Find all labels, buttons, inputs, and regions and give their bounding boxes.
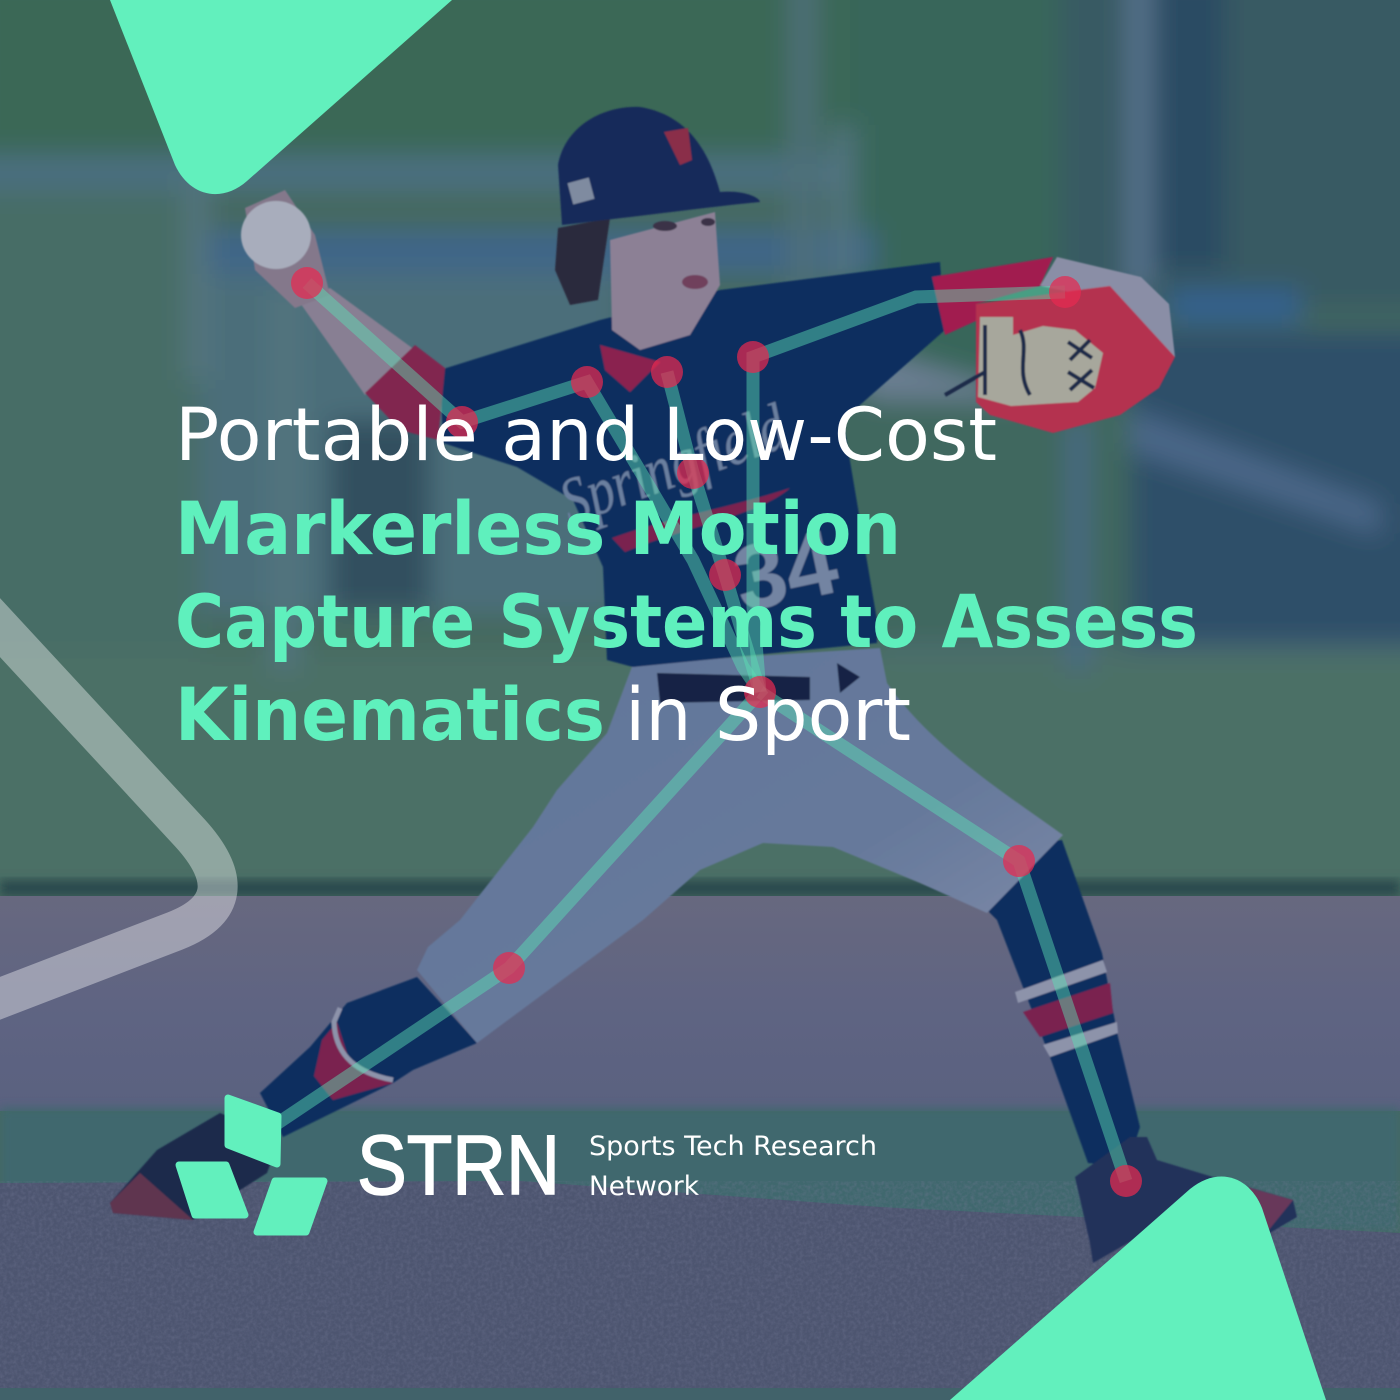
glove [976, 286, 1175, 433]
glove sleeve [932, 257, 1053, 335]
skeleton segments [275, 283, 1126, 1181]
title: Markerless Motion [175, 487, 901, 572]
pants [417, 648, 1063, 1043]
back shoe [110, 1113, 280, 1220]
belt [657, 663, 860, 703]
glove hand [1040, 257, 1175, 357]
corner shape: bottom right triangle [950, 1177, 1326, 1400]
back sock [260, 977, 477, 1137]
cap [558, 107, 760, 225]
torso jersey [440, 262, 945, 667]
title: Portable and Low-Cost [175, 393, 997, 478]
throwing arm [298, 288, 415, 395]
decorative outline triangle [0, 606, 218, 1006]
corner shape: top left triangle [110, 0, 452, 194]
skeleton joints [291, 267, 1142, 1197]
front shoe [1075, 1137, 1297, 1263]
jersey lettering: 34 [725, 511, 846, 632]
jersey lettering [550, 390, 846, 632]
pitcher figure [110, 107, 1297, 1263]
logo [179, 1098, 877, 1232]
jersey lettering: Springfield [550, 390, 797, 539]
logo tagline [589, 1131, 877, 1202]
facial features [653, 218, 715, 289]
skeleton overlay [275, 267, 1142, 1197]
logo tagline: Sports Tech Research [589, 1131, 877, 1162]
neck and face [610, 212, 720, 350]
logo tagline: Network [589, 1171, 699, 1202]
title: in Sport [625, 673, 911, 758]
title: Kinematics [175, 673, 605, 758]
hand and ball [245, 190, 330, 308]
title: Capture Systems to Assess [175, 580, 1198, 665]
logo mark [179, 1098, 324, 1232]
title [175, 393, 1198, 758]
front sock [987, 840, 1140, 1167]
logo wordmark: STRN [357, 1118, 560, 1212]
